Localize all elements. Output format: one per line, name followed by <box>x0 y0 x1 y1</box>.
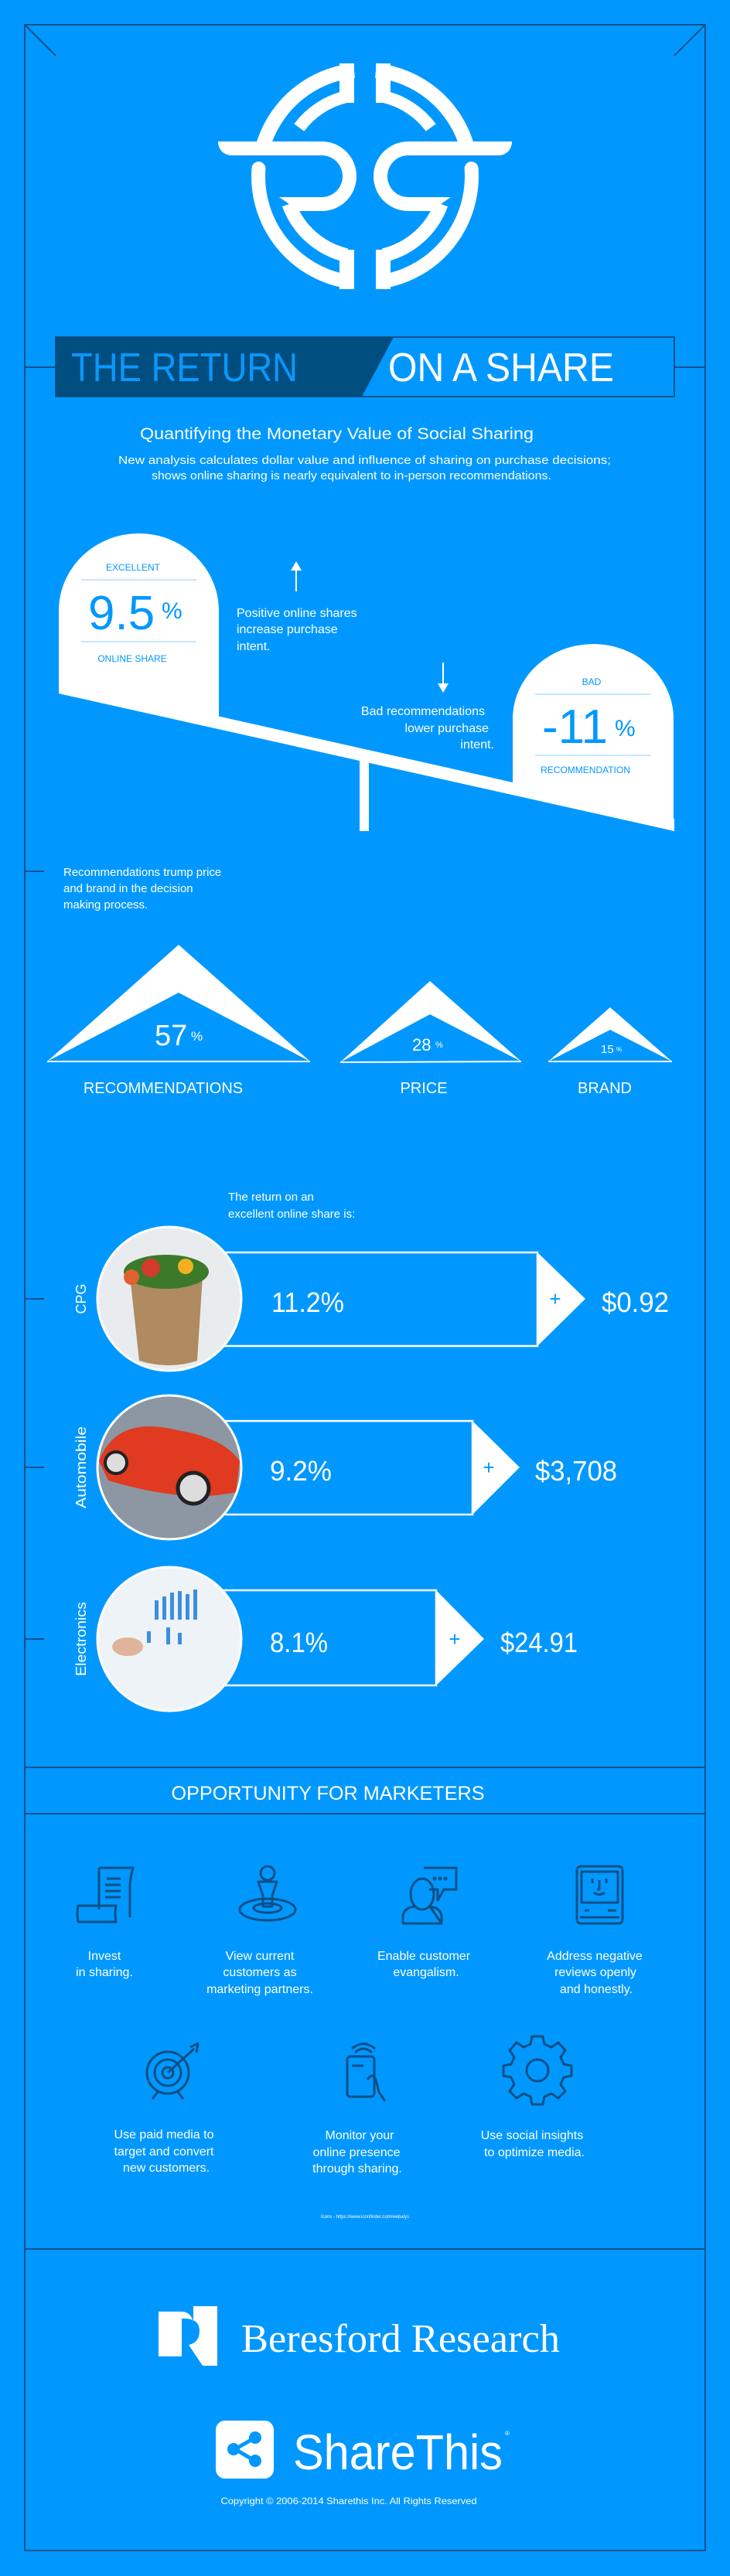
row: CPG: + <box>549 1287 561 1310</box>
text: row2 labels: Use paid media to <box>114 2128 214 2142</box>
text: row2 labels: Use social insights <box>481 2129 583 2142</box>
text: positive shares <box>237 607 357 653</box>
logo: Beresford Research: Beresford Research <box>241 2317 560 2361</box>
chart: triangles: PRICE <box>400 1080 448 1097</box>
text: row1 labels: evangalism. <box>393 1966 459 1979</box>
text: row2 labels: Monitor your <box>326 2129 394 2142</box>
logo: ShareThis <box>216 2421 510 2480</box>
icons row 1 <box>77 1866 623 1923</box>
text: recommendations trump: and brand in the decision <box>63 882 193 895</box>
logo: ShareThis: ShareThis <box>293 2424 503 2480</box>
right arch: bad -11%: BAD <box>582 676 602 687</box>
row: Automobile: 9.2% <box>270 1455 332 1487</box>
logo: Beresford Research <box>159 2306 560 2366</box>
icon: computer <box>577 1866 623 1923</box>
seesaw chart <box>59 533 674 831</box>
left arch: excellent 9.5%: % <box>162 598 182 624</box>
right arch: bad -11% <box>513 644 674 831</box>
text: row2 labels <box>114 2128 585 2176</box>
text: bad recommendations: intent. <box>460 738 494 751</box>
right arch: bad -11%: -11 <box>542 700 608 754</box>
text: positive shares: increase purchase <box>237 623 338 636</box>
text: row1 labels: customers as <box>223 1966 297 1979</box>
right arch: bad -11%: % <box>615 716 636 741</box>
subtitle: shows online sharing is nearly equivalent to in-person recommendations. <box>152 469 551 482</box>
row: Electronics: $24.91 <box>500 1627 578 1658</box>
text: row1 labels: marketing partners. <box>206 1983 313 1996</box>
text: row2 labels: to optimize media. <box>484 2146 585 2159</box>
text: return on share: The return on an <box>228 1191 314 1204</box>
text: row1 labels: in sharing. <box>76 1966 133 1979</box>
text: return on share <box>228 1191 355 1221</box>
text: recommendations trump <box>63 866 221 911</box>
heading: opportunity for marketers: OPPORTUNITY FOR MARKETERS <box>172 1783 484 1804</box>
text: row1 labels <box>76 1950 643 1996</box>
left arch: excellent 9.5% <box>59 533 219 729</box>
icon: scroll <box>77 1868 133 1922</box>
arrow down <box>438 663 449 693</box>
title banner: THE RETURN <box>71 346 298 390</box>
row: Automobile: Automobile <box>73 1426 89 1508</box>
row: CPG: $0.92 <box>602 1286 669 1318</box>
text: bad recommendations <box>361 705 494 751</box>
text: row1 labels: reviews openly <box>554 1966 636 1979</box>
title banner <box>56 337 674 397</box>
icons credit: Icons - https://www.iconfinder.com/webalys <box>321 2215 409 2220</box>
title banner: ON A SHARE <box>388 346 614 390</box>
chart: triangles: BRAND <box>578 1080 632 1097</box>
text: positive shares: intent. <box>237 640 271 653</box>
row: Electronics: Electronics <box>73 1602 89 1676</box>
chart: triangles: % <box>435 1041 443 1050</box>
icons row 2 <box>147 2036 571 2104</box>
row: CPG: CPG <box>73 1283 89 1314</box>
chart: triangles: % <box>616 1046 622 1053</box>
text: bad recommendations: Bad recommendations <box>361 705 485 718</box>
chart: triangles <box>47 945 672 1097</box>
text: row1 labels: View current <box>226 1950 295 1963</box>
chart: triangles: RECOMMENDATIONS <box>84 1080 243 1097</box>
chart: triangles: 57 <box>155 1020 187 1052</box>
text: bad recommendations: lower purchase <box>405 722 489 735</box>
icon: gear <box>503 2036 571 2104</box>
right arch: bad -11%: RECOMMENDATION <box>541 765 630 775</box>
subtitle: Quantifying the Monetary Value of Social Sharing <box>140 425 534 443</box>
text: row1 labels: and honestly. <box>560 1983 633 1996</box>
text: row2 labels: online presence <box>313 2146 401 2159</box>
row: Electronics: + <box>449 1627 461 1651</box>
chart: triangles: % <box>191 1029 203 1044</box>
row: Electronics: 8.1% <box>270 1627 328 1658</box>
icon: person on target <box>240 1866 295 1920</box>
subtitle: New analysis calculates dollar value and influence of sharing on purchase decisions; <box>118 454 611 467</box>
row: Automobile <box>73 1395 617 1539</box>
text: row2 labels: target and convert <box>114 2145 214 2159</box>
text: recommendations trump: making process. <box>63 898 148 911</box>
left arch: excellent 9.5%: ONLINE SHARE <box>97 653 167 664</box>
text: row2 labels: new customers. <box>123 2162 210 2175</box>
logo: ShareThis: ® <box>505 2430 510 2437</box>
subtitle <box>118 425 611 482</box>
copyright: Copyright © 2006-2014 Sharethis Inc. All Rights Reserved <box>221 2496 476 2506</box>
text: row1 labels: Enable customer <box>377 1950 471 1963</box>
text: positive shares: Positive online shares <box>237 607 357 620</box>
text: recommendations trump: Recommendations trump price <box>63 866 221 879</box>
text: row2 labels: through sharing. <box>312 2162 402 2176</box>
arrow up <box>291 561 302 591</box>
row: Automobile: $3,708 <box>535 1455 617 1487</box>
row: CPG: 11.2% <box>271 1286 344 1318</box>
text: row1 labels: Address negative <box>547 1950 643 1963</box>
left arch: excellent 9.5%: EXCELLENT <box>106 562 161 573</box>
left arch: excellent 9.5%: 9.5 <box>88 587 155 640</box>
text: return on share: excellent online share is: <box>228 1208 355 1221</box>
row: Electronics <box>73 1567 578 1711</box>
icon: target with arrow <box>147 2043 198 2099</box>
row: Automobile: + <box>483 1456 495 1479</box>
chart: triangles: 15 <box>601 1043 614 1056</box>
text: row1 labels: Invest <box>88 1950 121 1963</box>
row: CPG <box>73 1227 669 1371</box>
icon: phone with hand <box>347 2044 385 2101</box>
logo: RS emblem <box>218 63 512 289</box>
icon: person with speech bubble <box>403 1868 456 1923</box>
chart: triangles: 28 <box>412 1035 431 1055</box>
